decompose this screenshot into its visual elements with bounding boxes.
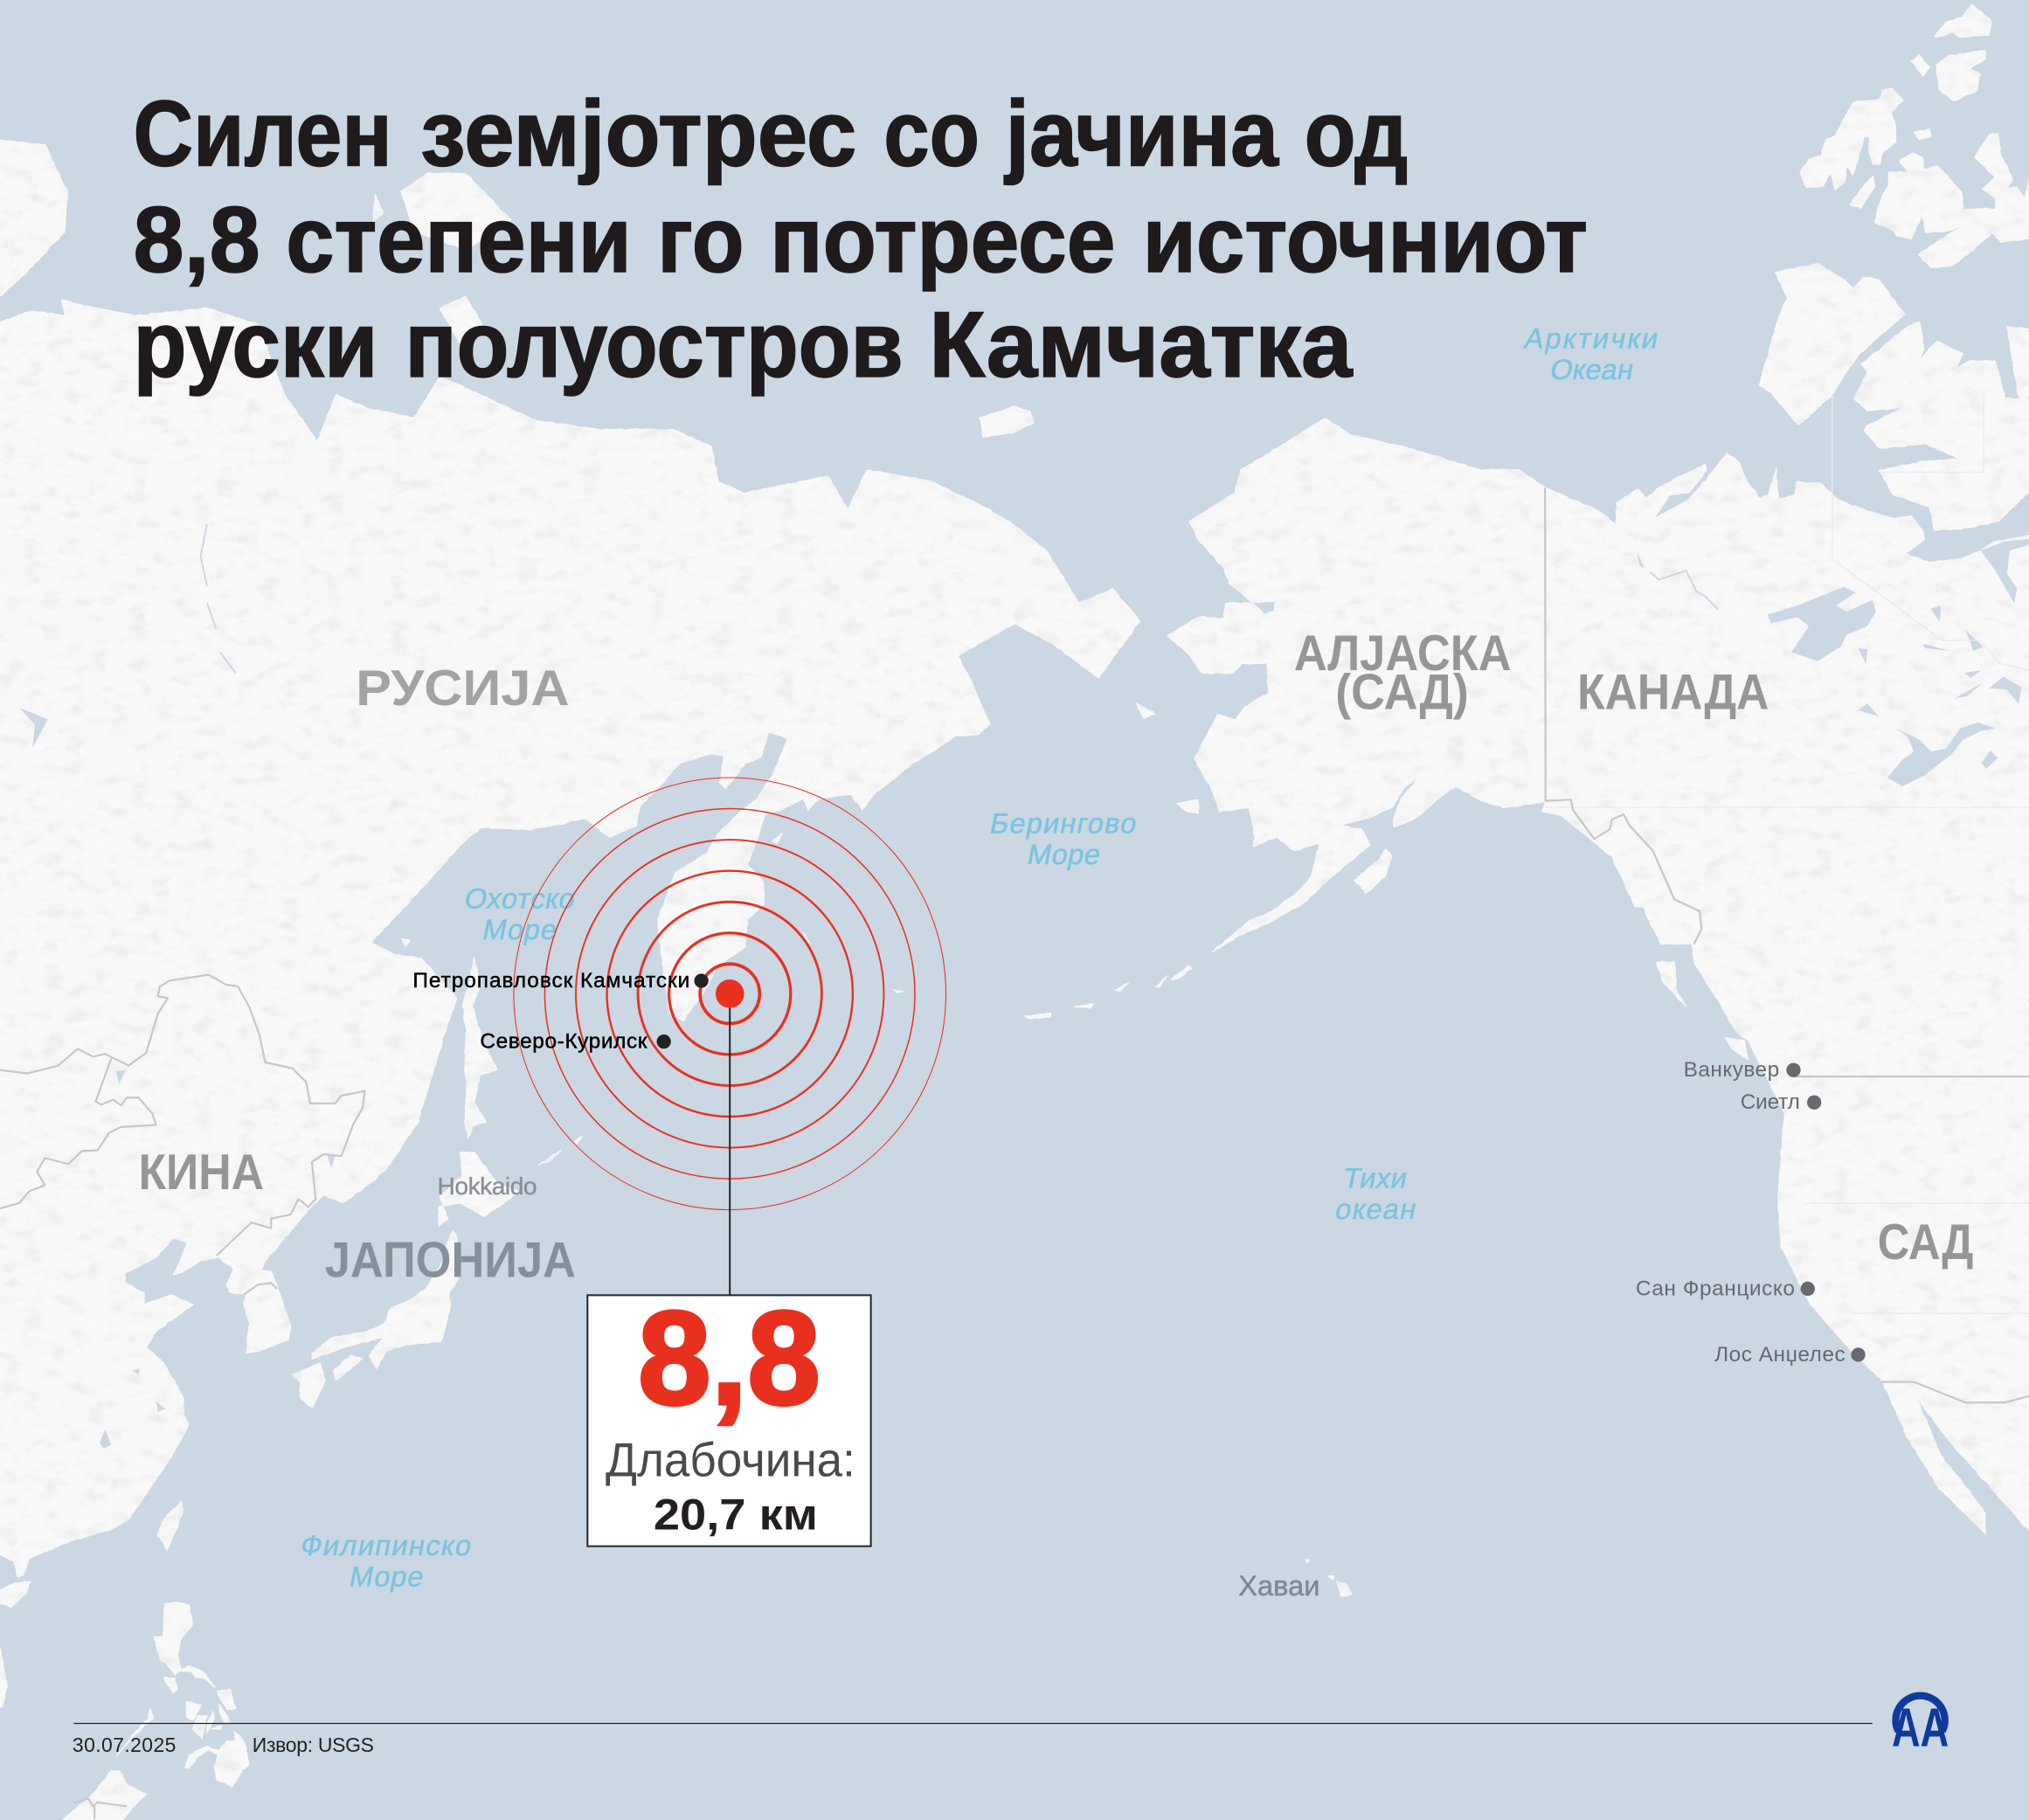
footer line xyxy=(73,1723,1873,1725)
city: San Francisco: Сан Франциско xyxy=(1636,1277,1795,1300)
title line 2: 8,8 xyxy=(134,187,260,292)
land: Kyushu xyxy=(293,1363,326,1408)
sea: Arctic Ocean line 2: Океан xyxy=(1548,353,1637,385)
land: North America xyxy=(1167,418,2029,1533)
rivers xyxy=(201,524,1719,673)
west coast cities xyxy=(1636,1058,1866,1367)
label: Hokkaido: Hokkaido xyxy=(438,1173,537,1200)
label: Japan: ЈАПОНИЈА xyxy=(325,1233,576,1289)
land: Taiwan xyxy=(158,1501,184,1550)
label: USA: САД xyxy=(1878,1214,1973,1270)
title line 1: Силен xyxy=(134,81,392,186)
label: Hawaii: Хаваи xyxy=(1238,1570,1319,1602)
sea labels xyxy=(298,322,1661,1592)
sea: Okhotsk Sea: Охотско xyxy=(462,882,578,915)
box frame xyxy=(587,1295,871,1547)
land: Arctic islands group one xyxy=(1800,88,1903,190)
city: Severo-Kurilsk: Северо-Курилск xyxy=(480,1030,647,1054)
title line 3: Камчатка xyxy=(929,292,1353,397)
depth value: 20,7 км xyxy=(654,1489,818,1539)
city: Los Angeles: Лос Анџелес xyxy=(1714,1343,1845,1367)
sea: Philippine Sea: Филипинско xyxy=(298,1529,474,1561)
border: Korea xyxy=(244,1283,277,1295)
sea: Bering Sea line 2: Море xyxy=(1025,839,1104,870)
label: China: КИНА xyxy=(138,1145,264,1201)
lakes: small Canadian lakes xyxy=(1637,552,2021,769)
sea: Philippine Sea line 2: Море xyxy=(347,1560,427,1592)
title line 1 xyxy=(134,81,1408,186)
logo: AA: AA xyxy=(1892,1698,1949,1758)
label: Russia: РУСИЈА xyxy=(356,661,570,716)
country labels xyxy=(138,626,1973,1289)
inlet: Bathurst area xyxy=(1981,539,2029,603)
sea: Okhotsk Sea line 2: Море xyxy=(481,913,560,945)
land: Vietnam edge xyxy=(0,1649,7,1708)
Kamchatka cities xyxy=(412,969,709,1054)
land: Hainan xyxy=(0,1581,31,1607)
border: Mongolia and China xyxy=(0,1058,156,1208)
city: Seattle: Сиетл xyxy=(1741,1090,1800,1114)
title line 3: полуостров xyxy=(405,292,904,397)
title xyxy=(134,81,1588,397)
land: Arctic islands group three xyxy=(1874,134,2029,268)
land: Hawaii xyxy=(1305,1559,1353,1596)
land: Hokkaido xyxy=(439,1152,519,1227)
land: Honshu xyxy=(312,1230,459,1368)
depth label: Длабочина: xyxy=(606,1433,855,1487)
label: Alaska: АЛЈАСКА xyxy=(1294,626,1512,682)
border: USA and Mexico xyxy=(1881,1382,2029,1402)
lake: Great Slave xyxy=(1887,723,1995,786)
title line 3 xyxy=(134,292,1353,397)
title line 3: руски xyxy=(134,292,377,397)
leader line xyxy=(729,993,731,1295)
date: 30.07.2025 xyxy=(73,1733,176,1756)
label: Canada: КАНАДА xyxy=(1577,665,1769,721)
title line 1: јачина xyxy=(1004,81,1279,186)
land: Kuril islands xyxy=(538,1136,582,1166)
city: Vancouver: Ванкувер xyxy=(1684,1058,1779,1082)
epicenter dot xyxy=(716,979,744,1008)
magnitude value: 8,8 xyxy=(638,1284,821,1433)
lake: Great Bear xyxy=(1768,587,1876,661)
source: Извор: USGS xyxy=(253,1733,374,1756)
land: Arctic Russia islands xyxy=(0,140,1034,993)
border: Canada and USA xyxy=(1793,1076,2029,1077)
title line 2: го xyxy=(657,187,744,292)
magnitude box xyxy=(587,1284,871,1547)
land: Banks Island xyxy=(1759,264,1905,426)
borders xyxy=(0,488,2029,1819)
sea: Pacific Ocean: Тихи xyxy=(1340,1162,1410,1194)
land: Victoria Island and east xyxy=(1854,322,2029,530)
title line 2: степени xyxy=(286,187,632,292)
title line 2: потресе xyxy=(770,187,1116,292)
title line 1: од xyxy=(1305,81,1408,186)
title line 2: источниот xyxy=(1143,187,1588,292)
sea: Pacific Ocean line 2: океан xyxy=(1333,1193,1419,1225)
border: Borneo xyxy=(74,1798,127,1819)
title line 1: земјотрес xyxy=(420,81,856,186)
title line 2 xyxy=(134,187,1588,292)
land: Sakhalin xyxy=(462,957,498,1138)
city: Petropavlovsk-Kamchatsky: Петропавловск Камчатски xyxy=(412,969,689,993)
land: Pacific coast islands xyxy=(1657,962,1748,1059)
seismic rings xyxy=(514,778,946,1210)
sea: Arctic Ocean: Арктички xyxy=(1522,322,1661,354)
sea: Bering Sea: Берингово xyxy=(987,807,1139,840)
land: Eurasia xyxy=(0,301,1140,1577)
land: Borneo xyxy=(63,1771,147,1820)
faint provincial lines xyxy=(1545,393,2029,1313)
land: Shikoku xyxy=(334,1355,363,1381)
land: Alaska islands xyxy=(1025,702,1392,1018)
lakes and rivers xyxy=(19,539,2029,1449)
land: Arctic islands group two xyxy=(1849,4,1991,208)
border: Russia and China xyxy=(0,975,364,1256)
border: Alaska and Canada xyxy=(1545,488,1701,945)
label: USA in Alaska: (САД) xyxy=(1335,665,1469,721)
lakes: Asia xyxy=(19,708,336,1449)
land: Philippines xyxy=(116,1602,249,1787)
title line 1: со xyxy=(883,81,980,186)
